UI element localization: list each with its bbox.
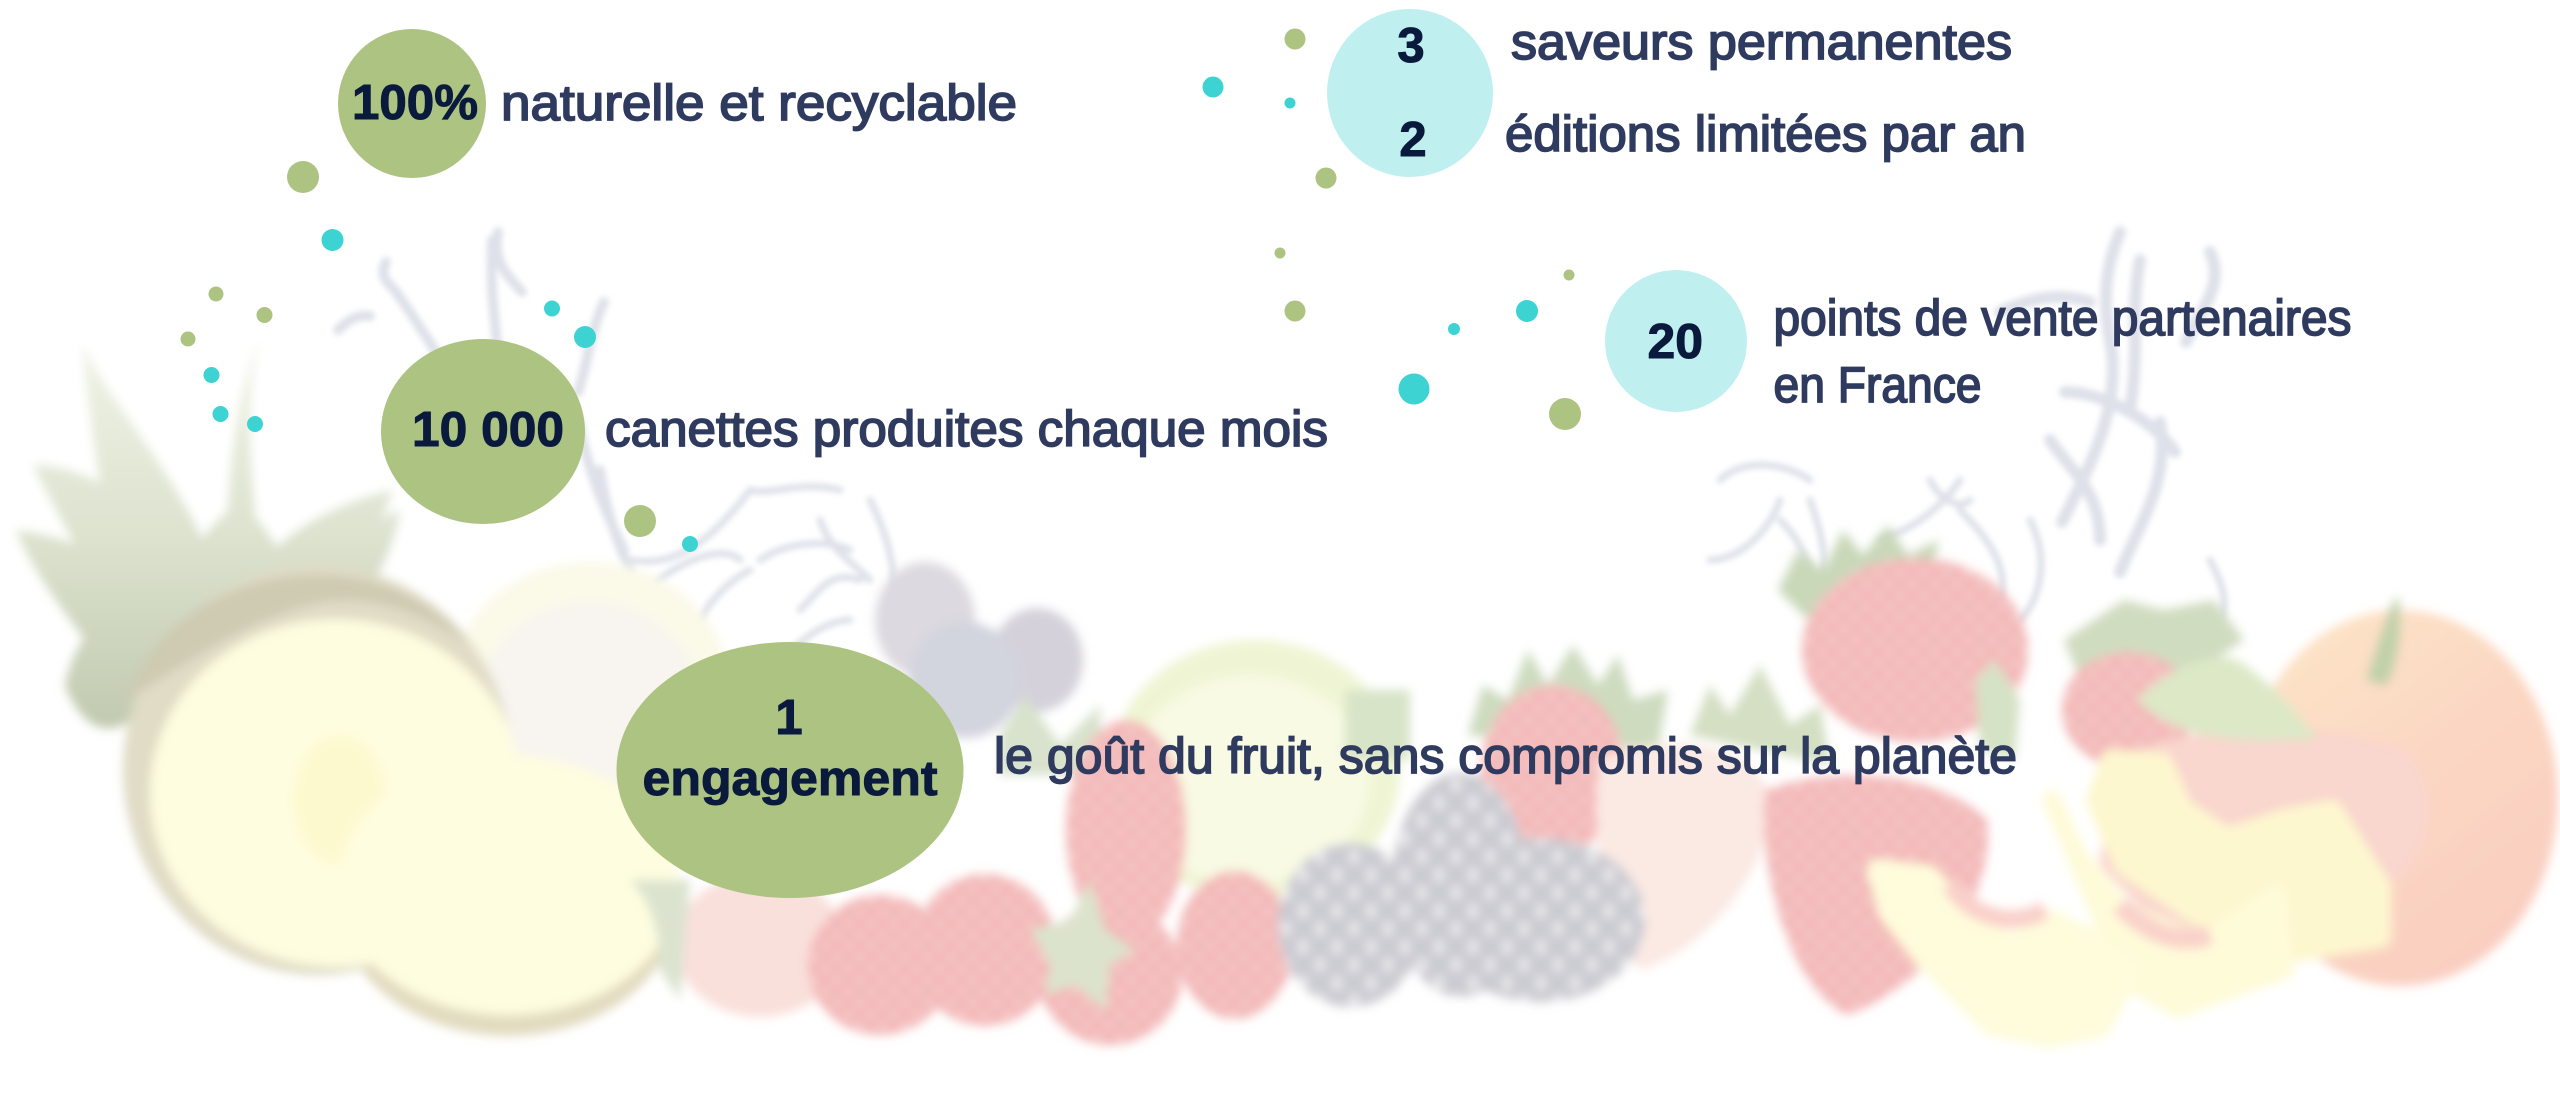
blackberries <box>1278 843 1422 1007</box>
stat: 10 000 canettes produites chaque mois: 10 000 <box>412 403 564 457</box>
pineapple rim <box>123 565 513 975</box>
background: water splashes <box>338 232 2224 680</box>
stat: 100% naturelle et recyclable: naturelle et recyclable <box>501 75 1017 131</box>
raspberries <box>808 895 952 1035</box>
stat: 10 000 canettes produites chaque mois <box>381 339 1328 524</box>
coconut <box>450 562 730 818</box>
pineapple leaves <box>16 335 400 728</box>
peach pink flesh <box>2115 743 2415 920</box>
stat: 1 engagement: le goût du fruit, sans compromis sur la planète <box>994 728 2017 784</box>
stat: 1 engagement: engagement <box>642 752 938 806</box>
stat: 20 points de vente: en France <box>1774 357 1982 413</box>
decorative bubbles: cyan <box>204 76 1538 552</box>
strawberry right <box>2064 600 2244 690</box>
big strawberry front <box>1764 775 1988 1015</box>
decorative bubbles: green <box>180 28 1581 537</box>
stat: 3 saveurs, 2 éditions limitées <box>1327 9 2026 177</box>
background: fruit illustration <box>16 335 2558 1045</box>
peach slices <box>2097 760 2380 951</box>
cut strawberry <box>1596 744 1770 970</box>
strawberry centre <box>1066 720 1186 940</box>
lime <box>1110 640 1400 900</box>
pineapple slices <box>150 619 522 967</box>
stat: 3 saveurs, 2 éditions limitées: 2 <box>1399 113 1427 167</box>
stat: 100% naturelle et recyclable <box>338 29 1017 178</box>
green leaves middle <box>1690 665 1830 765</box>
tomato / apple <box>675 873 845 1017</box>
stat: 3 saveurs, 2 éditions limitées: éditions limitées par an <box>1505 106 2026 162</box>
stat: 10 000 canettes produites chaque mois: canettes produites chaque mois <box>605 401 1328 457</box>
stat: 3 saveurs, 2 éditions limitées: saveurs permanentes <box>1511 14 2012 70</box>
strawberry tops <box>1468 645 1668 750</box>
stat: 100% naturelle et recyclable: 100% <box>352 76 478 130</box>
stat: 1 engagement: 1 <box>775 691 803 745</box>
peach slice pink edge <box>1950 885 2045 919</box>
peach leaves <box>2137 657 2317 741</box>
stat: 1 engagement <box>616 642 2017 898</box>
stat: 20 points de vente: 20 <box>1648 315 1703 369</box>
stat: 20 points de vente: points de vente partenaires <box>1774 290 2352 346</box>
stat: 3 saveurs, 2 éditions limitées: 3 <box>1397 19 1425 73</box>
peach <box>2242 610 2558 986</box>
strawberry top right <box>1778 525 1938 640</box>
green leaves centre <box>1000 695 1100 775</box>
plums <box>875 562 975 678</box>
stat: 20 points de vente <box>1605 270 2352 413</box>
